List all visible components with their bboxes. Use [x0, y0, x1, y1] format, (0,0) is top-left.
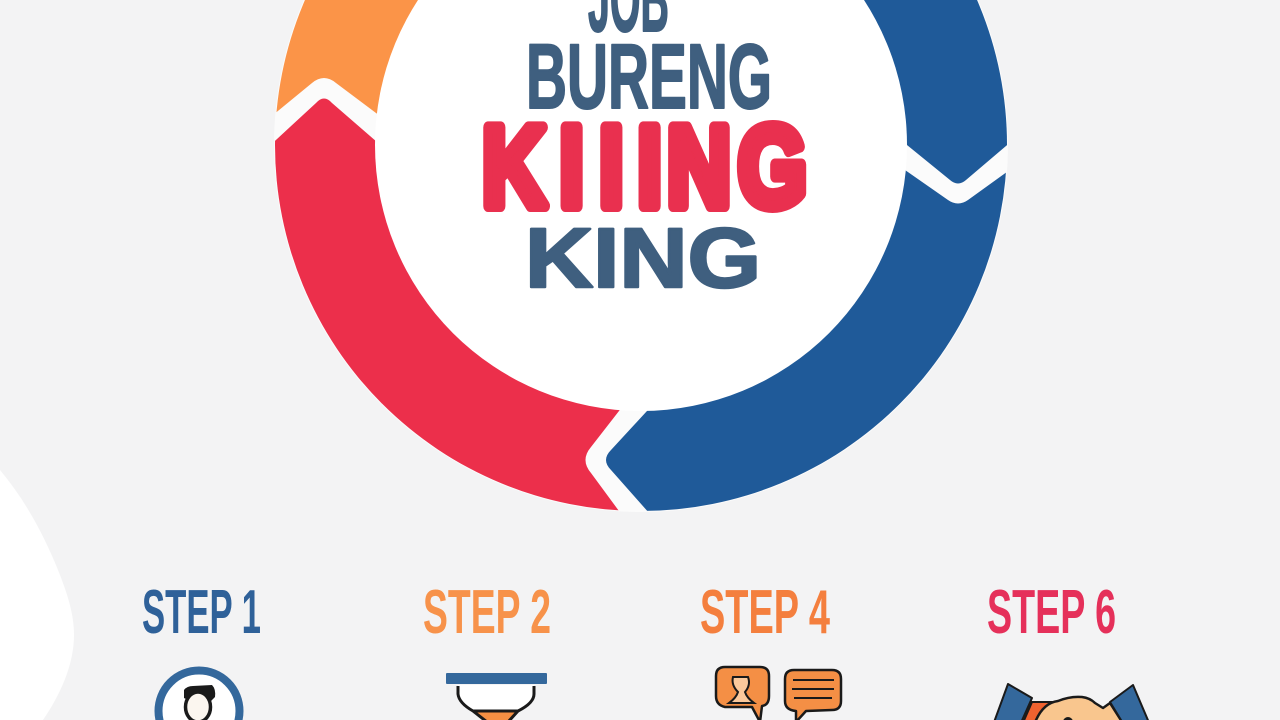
heading: step 2: STEP 2	[423, 578, 551, 647]
background blob	[0, 470, 74, 720]
heading: step 6: STEP 6	[987, 578, 1116, 647]
circular diagram	[275, 0, 1007, 511]
ring segment: red	[275, 98, 620, 510]
ring segment: blue upper	[864, 0, 1007, 184]
title: BURENG: BURENG	[526, 26, 772, 128]
title: KING: KING	[525, 211, 761, 305]
icon: speech bubbles	[716, 667, 841, 720]
ring segment: blue lower	[606, 170, 1006, 511]
icon: hourglass	[446, 673, 547, 720]
heading: step 1: STEP 1	[142, 578, 261, 647]
icon: person badge	[158, 670, 240, 720]
icon: handshake character	[993, 684, 1150, 720]
ring segment: orange	[276, 0, 418, 114]
centre white disc	[375, 0, 907, 411]
title: KIIING: KIIING	[482, 102, 807, 231]
heading: step 4: STEP 4	[700, 578, 830, 647]
